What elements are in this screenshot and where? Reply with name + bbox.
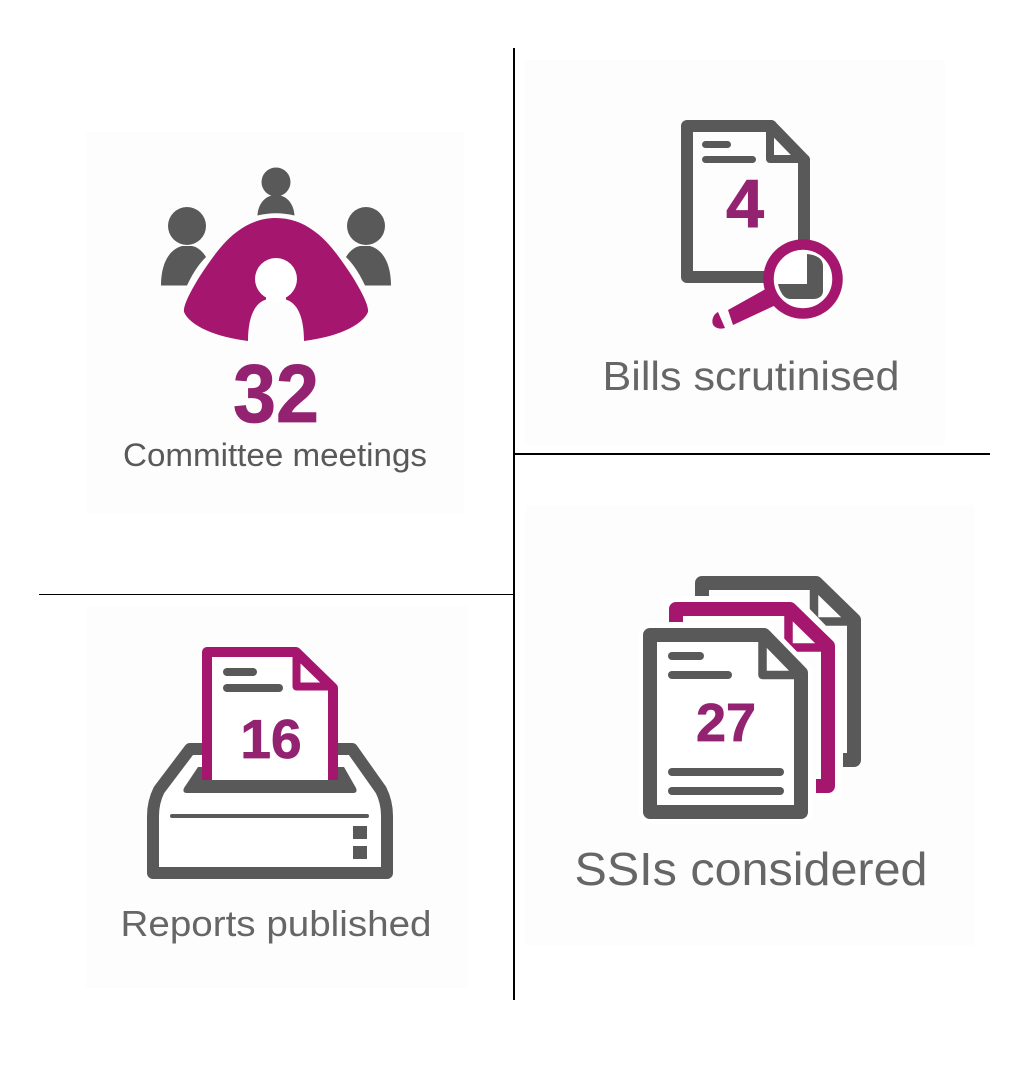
panel: committee meetings [123, 168, 427, 473]
number: 27: 27 [696, 693, 756, 753]
panel: reports published [120, 652, 432, 944]
panel: bills scrutinised [602, 126, 900, 399]
number: 16: 16 [240, 708, 302, 770]
number: 4: 4 [726, 166, 764, 242]
icon: document with magnifier [687, 126, 838, 329]
label: Bills scrutinised: Bills scrutinised [602, 353, 900, 399]
icon: people around a table [161, 168, 391, 341]
icon: tray with document [153, 652, 387, 873]
label: SSIs considered: SSIs considered [574, 843, 928, 895]
label: Reports published: Reports published [120, 903, 432, 944]
label: Committee meetings: Committee meetings [123, 437, 427, 473]
icon: stack of documents [650, 583, 854, 812]
panel: SSIs considered [574, 583, 928, 895]
number: 32: 32 [233, 347, 319, 440]
